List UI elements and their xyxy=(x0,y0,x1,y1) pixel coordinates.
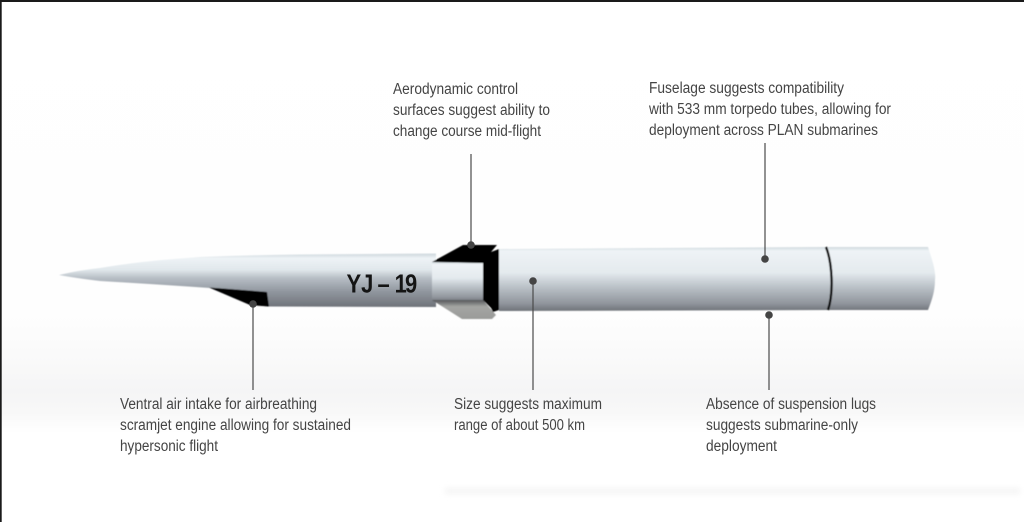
leader: air intake xyxy=(249,300,257,390)
callout: air intake: hypersonic flight xyxy=(120,438,219,455)
callout: suspension lugs: suggests submarine-only xyxy=(706,417,858,434)
callout: fuselage: Fuselage suggests compatibility xyxy=(649,80,844,97)
callout: size xyxy=(454,396,602,434)
callout: air intake: Ventral air intake for airbreathing xyxy=(120,396,317,413)
callout: suspension lugs: deployment xyxy=(706,438,778,455)
fuselage joint line xyxy=(826,247,832,310)
missile designation: YJ–19 xyxy=(346,270,417,299)
missile forward body and nose xyxy=(59,254,436,307)
callout: fuselage xyxy=(648,80,891,139)
leader: suspension lugs xyxy=(765,311,773,390)
callout: control surfaces: Aerodynamic control xyxy=(393,81,518,98)
leader: fuselage xyxy=(761,143,769,263)
background streak xyxy=(445,488,1020,494)
callout: control surfaces: change course mid-flight xyxy=(393,123,542,140)
upper control fin and black band xyxy=(432,245,499,312)
ventral air intake xyxy=(209,288,269,306)
control section xyxy=(432,262,486,302)
callout: size: Size suggests maximum xyxy=(454,396,602,413)
leader: control surfaces xyxy=(467,154,475,249)
callout: air intake xyxy=(120,396,351,455)
callout: suspension lugs: Absence of suspension lugs xyxy=(706,396,876,413)
callout: control surfaces: surfaces suggest ability to xyxy=(393,102,550,119)
missile xyxy=(59,245,935,319)
callout: air intake: scramjet engine allowing for sustained xyxy=(120,417,351,434)
leader: size xyxy=(529,277,537,390)
callout: size: range of about 500 km xyxy=(454,417,585,434)
lower control fin xyxy=(432,300,496,319)
callout: fuselage: with 533 mm torpedo tubes, allowing for xyxy=(648,101,891,118)
rear fuselage xyxy=(499,247,935,311)
callout: control surfaces xyxy=(393,81,550,140)
callout: suspension lugs xyxy=(706,396,876,455)
callout: fuselage: deployment across PLAN submarines xyxy=(649,122,878,139)
